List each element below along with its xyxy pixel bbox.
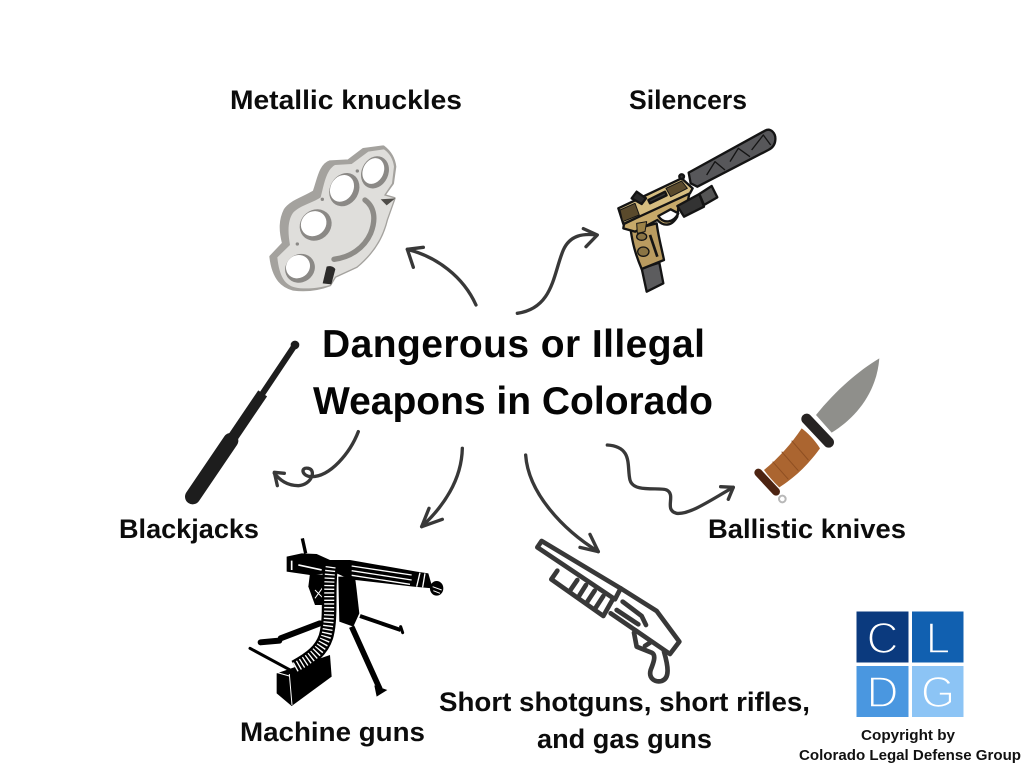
- logo: CLDG: [856, 612, 964, 717]
- copyright text: Copyright by: [861, 728, 955, 744]
- icon: machine gun: [250, 538, 443, 706]
- icon: ballistic knife: [758, 358, 879, 502]
- copyright text: Colorado Legal Defense Group: [799, 748, 1021, 764]
- label: short shotguns: [439, 687, 810, 754]
- arrow: to silencers: [517, 229, 597, 313]
- label: silencers: Silencers: [629, 85, 747, 115]
- logo: CLDG: D: [867, 668, 898, 717]
- logo: CLDG: C: [867, 614, 898, 663]
- logo: CLDG: G: [921, 668, 955, 717]
- icon: shotgun: [537, 541, 679, 681]
- arrow: to blackjacks: [274, 432, 358, 486]
- title: Weapons in Colorado: [313, 380, 713, 423]
- arrow: to shotguns: [526, 455, 598, 552]
- label: ballistic knives: Ballistic knives: [708, 514, 906, 544]
- arrow: to metallic knuckles: [407, 247, 476, 305]
- label: metallic knuckles: Metallic knuckles: [230, 85, 462, 115]
- icon: metallic knuckles: [271, 147, 395, 290]
- label: short shotguns: and gas guns: [537, 724, 712, 754]
- label: short shotguns: Short shotguns, short rifles,: [439, 687, 810, 717]
- logo: CLDG: L: [926, 614, 950, 663]
- icon: blackjack baton: [193, 341, 299, 497]
- label: machine guns: Machine guns: [240, 717, 425, 747]
- copyright text: [799, 728, 1021, 764]
- title: [313, 323, 713, 423]
- arrow: to machine guns: [422, 448, 462, 527]
- icon: pistol with silencer: [618, 130, 775, 292]
- title: Dangerous or Illegal: [322, 323, 705, 366]
- arrow: to ballistic knives: [607, 445, 733, 513]
- label: blackjacks: Blackjacks: [119, 514, 259, 544]
